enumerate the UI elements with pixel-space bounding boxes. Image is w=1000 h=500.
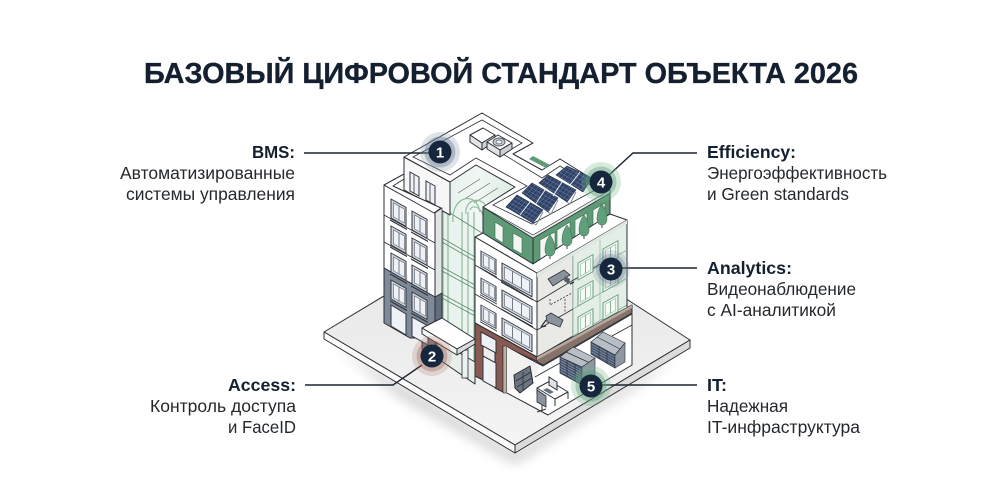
callout: Efficiency: [581, 142, 887, 204]
Analytics text: с AI-аналитикой: [707, 300, 836, 320]
title: БАЗОВЫЙ ЦИФРОВОЙ СТАНДАРТ ОБЪЕКТА 2026: [144, 56, 858, 90]
cabinet: [514, 366, 533, 393]
upper windows: [410, 172, 435, 205]
open ground floor IT room: [507, 305, 632, 415]
callout: BMS: [120, 132, 460, 204]
tower roof parapet: [384, 174, 441, 213]
Access text: Контроль доступа: [150, 396, 296, 416]
Efficiency leader line: [609, 153, 697, 175]
isometric building illustration: [324, 113, 690, 464]
facade windows: [480, 241, 618, 355]
Efficiency text: Efficiency:: [707, 142, 796, 162]
glass atrium: [442, 165, 515, 380]
roof equipment: [470, 128, 512, 157]
Access leader line: [305, 365, 422, 385]
IT text: IT:: [707, 375, 727, 395]
upper block wall: [404, 157, 450, 215]
badge 5: 5: [587, 378, 595, 396]
platform shadow: [335, 345, 680, 464]
IT text: Надежная: [707, 396, 788, 416]
camera top: [548, 270, 574, 286]
Efficiency text: Энергоэффективность: [707, 163, 887, 183]
camera wiring: [550, 293, 572, 312]
badge 3: [592, 250, 630, 288]
badge 4: 4: [597, 174, 606, 192]
Access text: и FaceID: [228, 417, 296, 437]
server racks right: [591, 332, 625, 368]
Analytics leader line: [620, 267, 697, 269]
left tower: [384, 174, 442, 360]
IT text: IT-инфраструктура: [707, 417, 860, 437]
BMS text: Автоматизированные: [120, 163, 295, 183]
Analytics text: [707, 258, 856, 320]
BMS text: BMS:: [252, 142, 295, 162]
right building: [475, 204, 627, 357]
Efficiency text: и Green standards: [707, 184, 849, 204]
badge 4: [581, 162, 621, 202]
tower windows: [390, 198, 428, 345]
badge 5: [571, 366, 611, 406]
terrace trees: [545, 204, 607, 256]
server racks left: [560, 347, 595, 385]
badge 2: 2: [428, 348, 436, 366]
Analytics text: Видеонаблюдение: [707, 279, 856, 299]
badge 3: 3: [607, 262, 615, 278]
green roof block walls: [483, 193, 610, 264]
BMS text: [120, 142, 295, 204]
badge 1: 1: [436, 144, 444, 162]
callout: Access: [150, 336, 452, 437]
brown ground floor facade: [475, 323, 543, 393]
terrace parapet: [475, 214, 627, 273]
entrance lobby and canopy: [422, 318, 475, 384]
camera bottom: [541, 313, 563, 327]
gray ground floors: [384, 268, 435, 356]
badge 1: [420, 132, 460, 172]
Access text: Access:: [228, 375, 296, 395]
IT text: [707, 375, 860, 437]
ground platform: [324, 222, 690, 453]
main roof: [404, 113, 610, 238]
badge 2: [412, 336, 452, 376]
callout: IT: [571, 366, 860, 437]
IT leader line: [600, 384, 697, 386]
Access text: [150, 375, 296, 437]
office desk: [537, 377, 568, 412]
solar panels: [506, 166, 592, 225]
Analytics text: Analytics:: [707, 258, 792, 278]
terrace arched windows: [540, 203, 605, 260]
Efficiency text: [707, 142, 887, 204]
callout: Analytics: [592, 250, 856, 320]
BMS leader line: [304, 152, 430, 154]
BMS text: системы управления: [126, 184, 295, 204]
